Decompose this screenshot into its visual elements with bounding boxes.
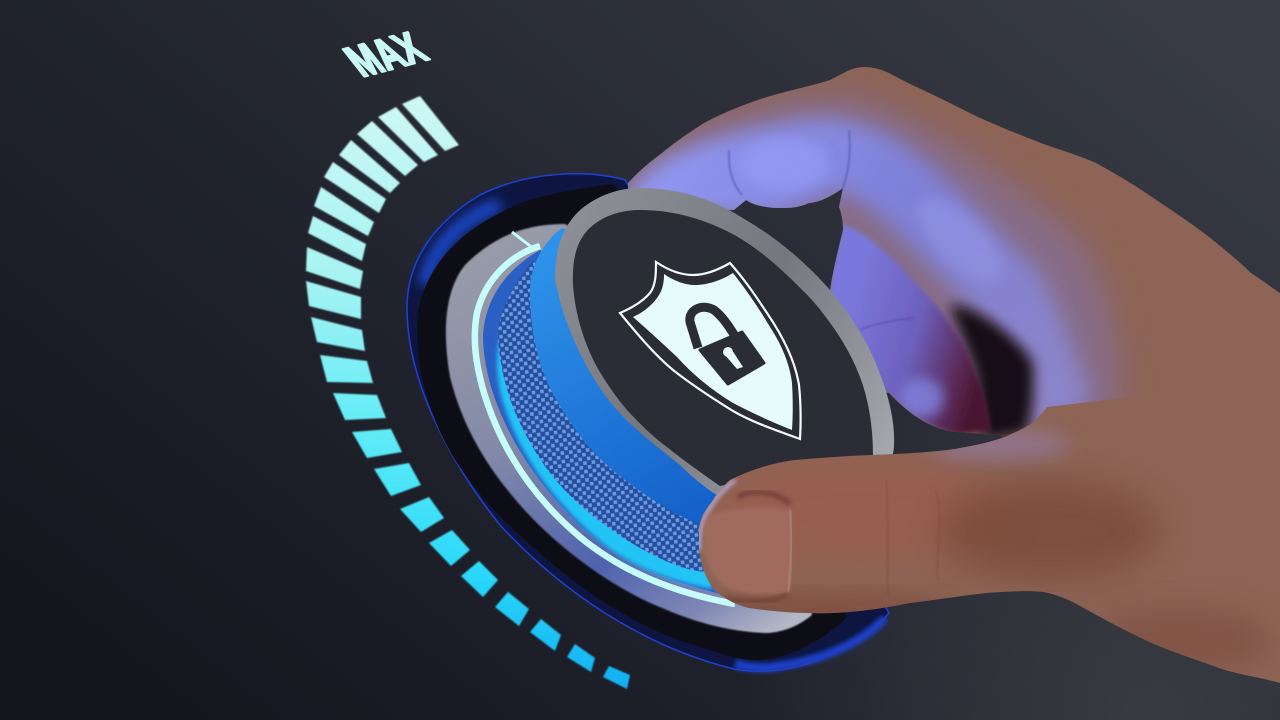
cavity between fingers [950,305,1033,440]
middle finger [825,225,991,434]
dial: cyan glow [497,290,730,589]
dial: dark top face [573,210,873,486]
shield fill [633,273,793,430]
dial: knurled grip [498,260,720,572]
soft purple spill [620,95,1120,440]
label: MAX: MAX [334,23,437,85]
dial: grey collar [446,224,812,633]
thumb tip edge light [699,480,735,550]
dial: blue cylinder side [530,228,780,530]
gauge scale: level ticks [306,96,630,689]
dial base: black recess [417,184,847,660]
dial: glowing ring [475,232,735,604]
thumbnail [704,508,791,595]
cuticle shadow [738,492,790,504]
blue light on the fingers [630,119,1090,440]
icon: security shield with padlock [620,262,801,439]
padlock [690,307,764,384]
dial: blue band under ring [483,250,740,596]
dial base: blue outer shell [407,174,889,671]
hand: thumb in front of the dial [699,397,1280,683]
position indicator [512,232,534,249]
hand: index and middle fingers behind the dial [628,67,1280,438]
dial: top cap rim [555,188,894,505]
shield outline [620,262,801,439]
